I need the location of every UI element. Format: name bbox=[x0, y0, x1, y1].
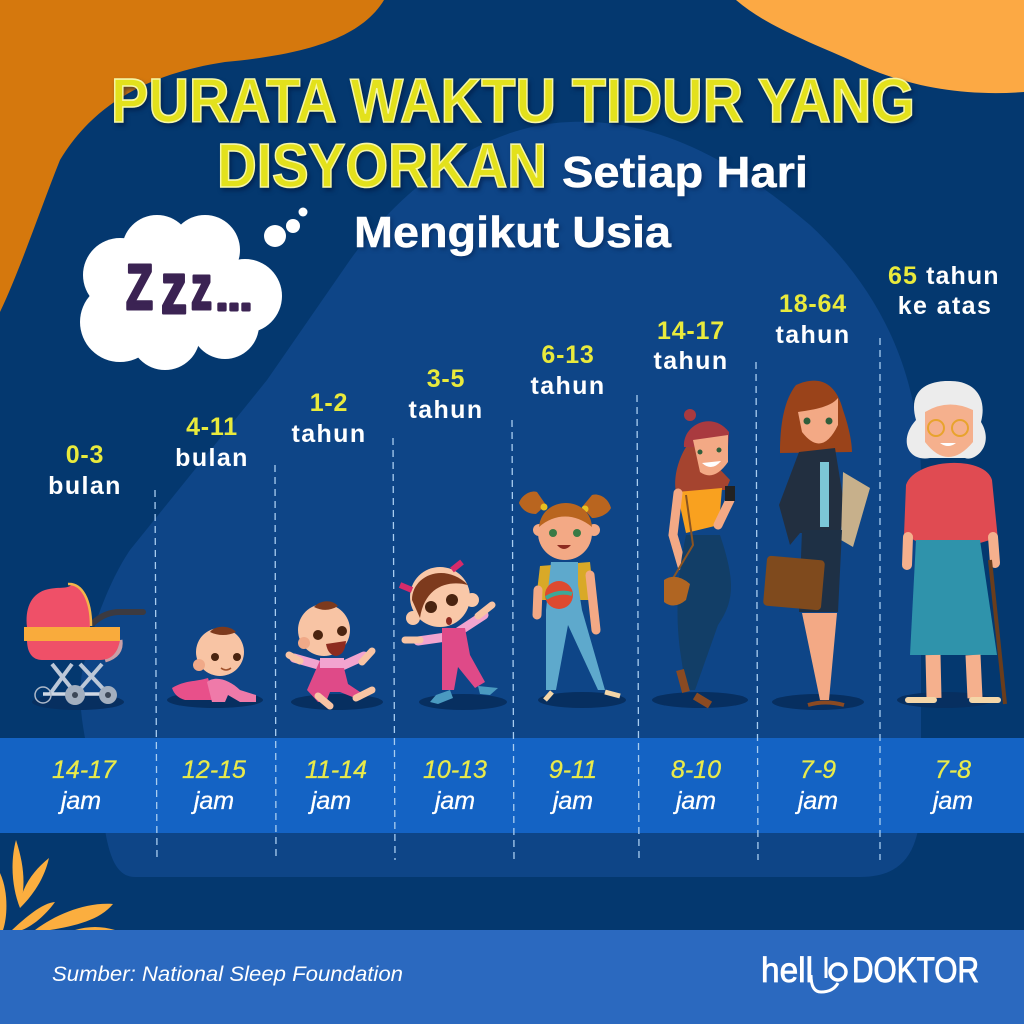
hours labels bbox=[52, 756, 973, 815]
hours labels: jam bbox=[58, 787, 101, 815]
age labels: tahun bbox=[653, 347, 729, 375]
age labels: tahun bbox=[291, 420, 367, 448]
logo bbox=[761, 951, 979, 992]
hours labels: 14-17 bbox=[52, 756, 117, 784]
age labels: 0-3 bbox=[66, 441, 104, 469]
source text: Sumber: National Sleep Foundation bbox=[52, 963, 403, 986]
icon: woman in suit bbox=[763, 381, 870, 710]
icon: child with ball bbox=[519, 491, 626, 708]
hours labels: jam bbox=[795, 787, 838, 815]
icon: stroller bbox=[24, 584, 143, 710]
age labels bbox=[48, 262, 1000, 500]
hours labels: 8-10 bbox=[671, 756, 721, 784]
sleep cloud: z bbox=[191, 254, 212, 323]
title: Mengikut Usia bbox=[354, 208, 672, 257]
age labels: 3-5 bbox=[427, 365, 465, 393]
hours labels: jam bbox=[930, 787, 973, 815]
age labels: 1-2 bbox=[310, 389, 348, 417]
hours band bbox=[0, 738, 1024, 833]
icon: toddler bbox=[400, 562, 507, 710]
logo: hell bbox=[761, 951, 813, 990]
age labels: 65 tahun bbox=[888, 262, 1000, 290]
title bbox=[111, 67, 915, 257]
age labels: tahun bbox=[775, 321, 851, 349]
hours labels: jam bbox=[673, 787, 716, 815]
hours labels: 7-9 bbox=[800, 756, 836, 784]
age labels: bulan bbox=[175, 444, 249, 472]
age labels: 4-11 bbox=[186, 413, 238, 441]
age labels: 6-13 bbox=[541, 341, 595, 369]
sleep cloud: ... bbox=[216, 275, 252, 319]
title: DISYORKAN bbox=[217, 132, 547, 201]
inner blob shape bbox=[80, 122, 921, 877]
icon: grandmother with cane bbox=[897, 381, 1005, 708]
hours labels: jam bbox=[191, 787, 234, 815]
hours labels: 7-8 bbox=[935, 756, 971, 784]
hours labels: jam bbox=[432, 787, 475, 815]
hours labels: jam bbox=[550, 787, 593, 815]
hours labels: jam bbox=[308, 787, 351, 815]
title: PURATA WAKTU TIDUR YANG bbox=[111, 67, 915, 136]
age labels: tahun bbox=[530, 372, 606, 400]
sleep cloud: z bbox=[161, 249, 187, 329]
divider lines bbox=[155, 338, 880, 860]
age labels: 18-64 bbox=[779, 290, 847, 318]
sleep cloud bbox=[80, 208, 308, 370]
top right orange shape bbox=[736, 0, 1024, 93]
age labels: bulan bbox=[48, 472, 122, 500]
hours labels: 12-15 bbox=[182, 756, 246, 784]
icon: teenager with phone bbox=[652, 409, 748, 708]
hours labels: 10-13 bbox=[423, 756, 487, 784]
icon: sitting baby bbox=[289, 601, 383, 710]
plant decoration bbox=[0, 840, 115, 930]
title: Setiap Hari bbox=[562, 148, 808, 197]
sleep cloud: Z bbox=[126, 251, 153, 323]
logo: DOKTOR bbox=[852, 951, 979, 990]
age labels: ke atas bbox=[898, 292, 992, 320]
top left orange shape bbox=[0, 0, 384, 312]
age labels: 14-17 bbox=[657, 317, 725, 345]
footer band bbox=[0, 930, 1024, 1024]
age labels: tahun bbox=[408, 396, 484, 424]
hours labels: 11-14 bbox=[305, 756, 367, 784]
icon: crawling baby bbox=[167, 627, 263, 708]
hours labels: 9-11 bbox=[549, 756, 597, 784]
